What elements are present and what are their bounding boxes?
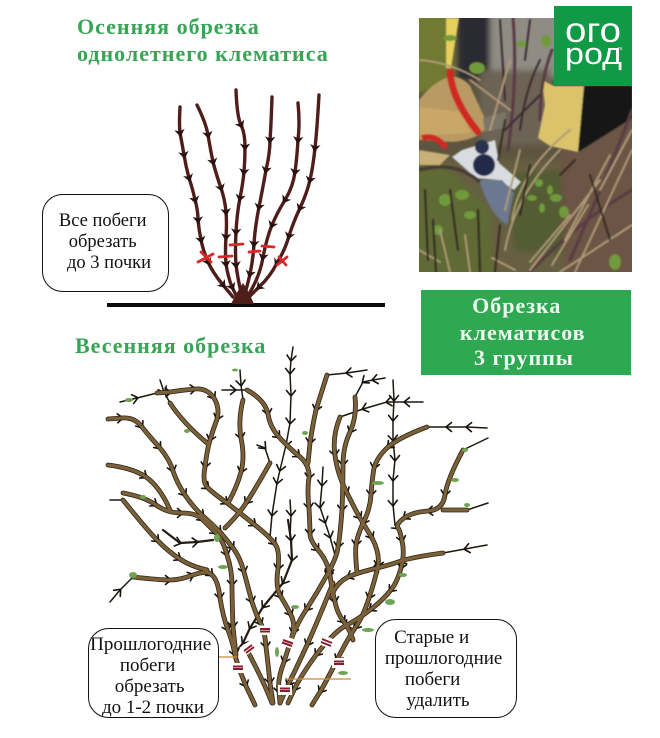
title: spring pruning: Весенняя обрезка	[75, 333, 266, 358]
callout: last year's shoots: побеги	[120, 655, 175, 676]
callout: last year's shoots	[88, 628, 218, 718]
callout: cut all shoots	[42, 194, 168, 292]
logo: Огород: ого	[565, 11, 621, 50]
callout: remove old shoots: удалить	[406, 690, 470, 711]
brown fill of main branches	[108, 375, 467, 705]
green leaflets	[125, 368, 470, 675]
logo: Огород: род	[565, 36, 622, 71]
dark twig crossing the stems	[163, 520, 292, 653]
logo: Огород	[554, 6, 632, 86]
callout: cut all shoots: до 3 почки	[67, 253, 151, 273]
callout: remove old shoots	[376, 620, 516, 718]
guide lines	[218, 657, 351, 679]
callout: remove old shoots: Старые и	[394, 627, 469, 648]
callout: last year's shoots: до 1-2 почки	[102, 697, 204, 718]
cut marks	[231, 626, 346, 695]
title: autumn pruning: однолетнего клематиса	[77, 41, 329, 66]
banner: pruning group 3 clematis: 3 группы	[474, 345, 574, 370]
banner: pruning group 3 clematis: Обрезка	[472, 293, 561, 318]
callout: cut all shoots: Все побеги	[59, 211, 147, 231]
callout: remove old shoots: прошлогодние	[385, 648, 502, 669]
title: autumn pruning: Осенняя обрезка	[77, 14, 260, 39]
ground line	[107, 303, 385, 307]
banner: pruning group 3 clematis	[421, 290, 631, 375]
callout: remove old shoots: побеги	[405, 669, 460, 690]
callout: last year's shoots: Прошлогодние	[90, 634, 211, 655]
cut marks	[198, 244, 287, 265]
callout: cut all shoots: обрезать	[69, 232, 137, 252]
dark outline and buds of main branches	[108, 375, 467, 705]
photo: hands pruning a plant with secateurs	[419, 18, 632, 272]
thin twigs	[110, 347, 488, 602]
banner: pruning group 3 clematis: клематисов	[460, 320, 586, 345]
plant: autumn clematis with cut marks	[107, 90, 385, 307]
root crown	[231, 283, 254, 304]
logo: Огород: ru	[618, 46, 623, 52]
callout: last year's shoots: обрезать	[115, 676, 185, 697]
stems	[180, 90, 319, 298]
plant: spring clematis with old shoots and cut marks	[108, 347, 488, 705]
